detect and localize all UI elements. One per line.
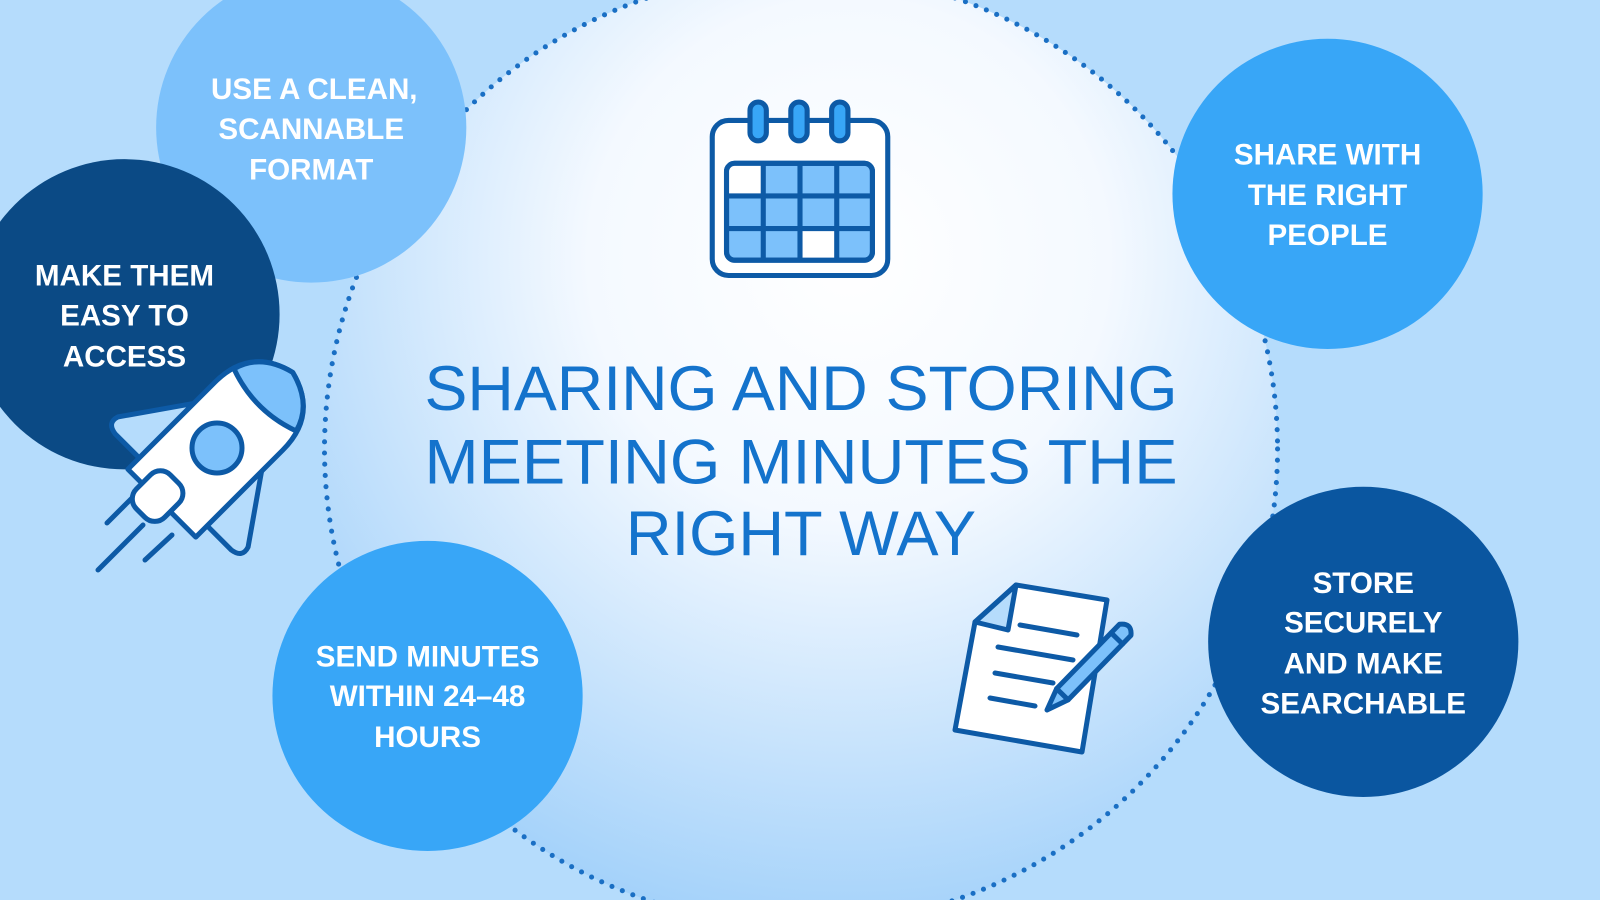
circle: send minutes within 24-48 hours: WITHIN 24–48 xyxy=(330,680,525,713)
circle: use a clean format: FORMAT xyxy=(249,154,373,187)
circle: use a clean format: SCANNABLE xyxy=(218,113,404,146)
icon: document with pencil xyxy=(955,585,1134,752)
title: MEETING MINUTES THE xyxy=(424,428,1178,498)
circle: use a clean format: USE A CLEAN, xyxy=(211,73,418,106)
circle: share with the right people xyxy=(1172,39,1483,349)
circle: use a clean format xyxy=(156,0,466,283)
title: SHARING AND STORING xyxy=(424,354,1178,424)
circle: make them easy to access xyxy=(0,159,280,469)
title xyxy=(424,354,1178,569)
central circle xyxy=(324,0,1278,900)
circle: send minutes within 24-48 hours xyxy=(272,541,583,851)
circle: share with the right people: THE RIGHT xyxy=(1248,179,1407,212)
circle: store securely xyxy=(1208,487,1518,797)
circle: store securely: SECURELY xyxy=(1284,607,1443,640)
circle: make them easy to access: EASY TO xyxy=(60,300,189,333)
circle: make them easy to access: MAKE THEM xyxy=(35,260,214,293)
circle: share with the right people: SHARE WITH xyxy=(1234,138,1421,171)
circle: store securely: SEARCHABLE xyxy=(1261,687,1466,720)
circle: make them easy to access: ACCESS xyxy=(63,340,186,373)
circle: store securely: STORE xyxy=(1313,567,1414,600)
circle: store securely: AND MAKE xyxy=(1284,647,1443,680)
icon: rocket xyxy=(81,307,358,584)
circle: send minutes within 24-48 hours: SEND MINUTES xyxy=(316,640,539,673)
icon: calendar xyxy=(712,102,888,276)
circle: send minutes within 24-48 hours: HOURS xyxy=(374,721,481,754)
title: RIGHT WAY xyxy=(626,499,976,569)
circle: share with the right people: PEOPLE xyxy=(1268,219,1388,252)
